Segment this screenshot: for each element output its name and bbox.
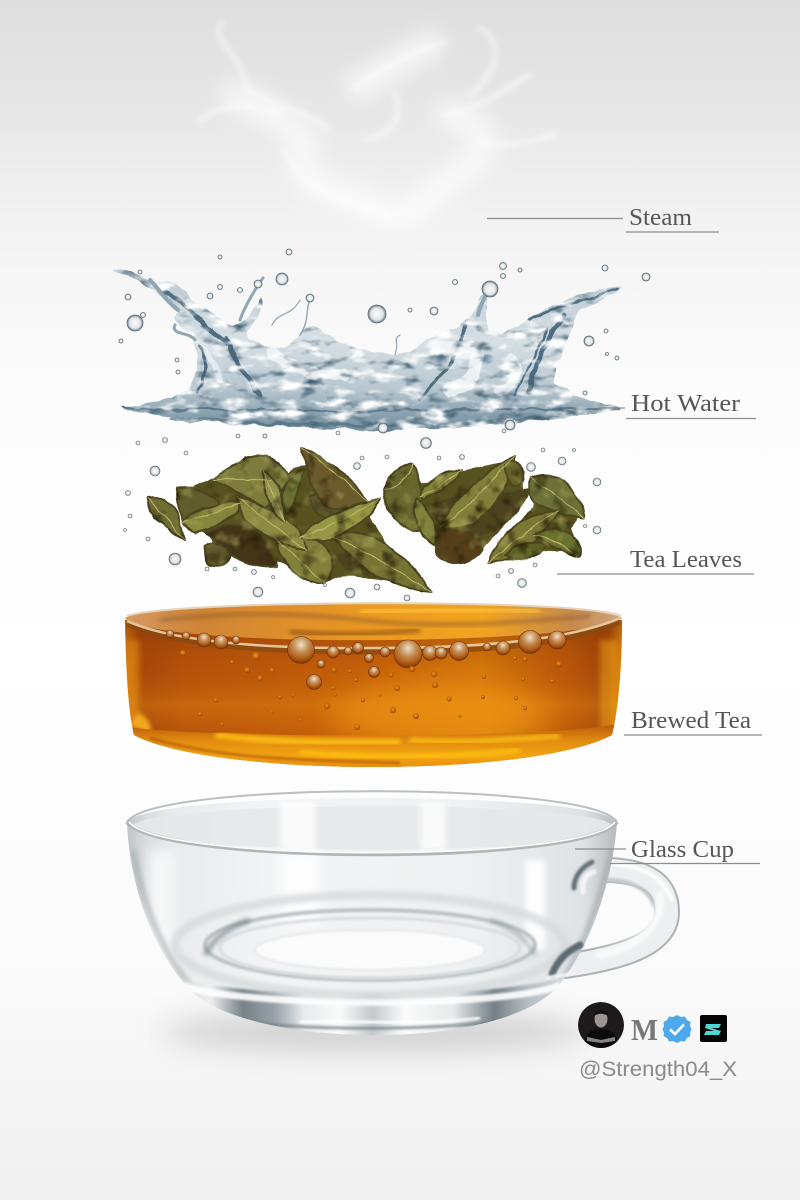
cup handle — [565, 864, 672, 966]
large bubbles — [166, 630, 566, 690]
water mass — [113, 269, 624, 430]
cup body — [127, 798, 617, 1035]
tea meniscus — [127, 622, 620, 652]
cup lower band — [184, 977, 564, 1035]
leaves with crumple texture — [147, 447, 583, 592]
label: Glass Cup: Glass Cup — [631, 837, 734, 863]
right leaves — [383, 464, 423, 531]
water arms — [150, 278, 488, 355]
illustration: steam — [200, 22, 555, 215]
cup reflections — [148, 850, 174, 970]
tea body — [125, 620, 622, 767]
tea surface — [125, 603, 622, 640]
illustration: glass cup — [127, 791, 672, 1054]
small bubbles — [180, 650, 562, 730]
illustration: hot water splash — [113, 249, 650, 438]
water droplets — [119, 249, 650, 438]
icon: avatar — [578, 1002, 624, 1050]
icon: app logo — [700, 1015, 727, 1042]
leaf veins — [147, 447, 583, 592]
illustration: tea leaves — [124, 429, 601, 601]
icon: verified badge — [662, 1015, 692, 1043]
handle: @Strength04_X — [579, 1058, 737, 1081]
initial M: M — [631, 1012, 658, 1047]
leaf droplets — [124, 429, 601, 601]
tea base band — [128, 724, 618, 770]
cup base ring — [175, 895, 565, 995]
left leaves — [147, 498, 184, 540]
label: Brewed Tea: Brewed Tea — [631, 708, 751, 734]
cup shadow — [160, 1010, 590, 1054]
water dark ripples — [125, 290, 620, 425]
handle joints — [548, 862, 594, 978]
tea vertical tone — [125, 620, 622, 728]
leaf masses behind — [184, 460, 578, 586]
label: Steam: Steam — [629, 205, 692, 231]
cup rim — [127, 791, 617, 854]
water body — [113, 269, 624, 430]
water highlights — [205, 346, 514, 390]
centre leaves — [277, 537, 333, 584]
watermark — [578, 1002, 737, 1081]
label: Tea Leaves: Tea Leaves — [630, 547, 742, 573]
back dark leaves — [147, 447, 583, 592]
illustration: brewed tea — [120, 603, 625, 770]
cup back wall — [133, 806, 612, 850]
label: Hot Water: Hot Water — [631, 391, 740, 417]
